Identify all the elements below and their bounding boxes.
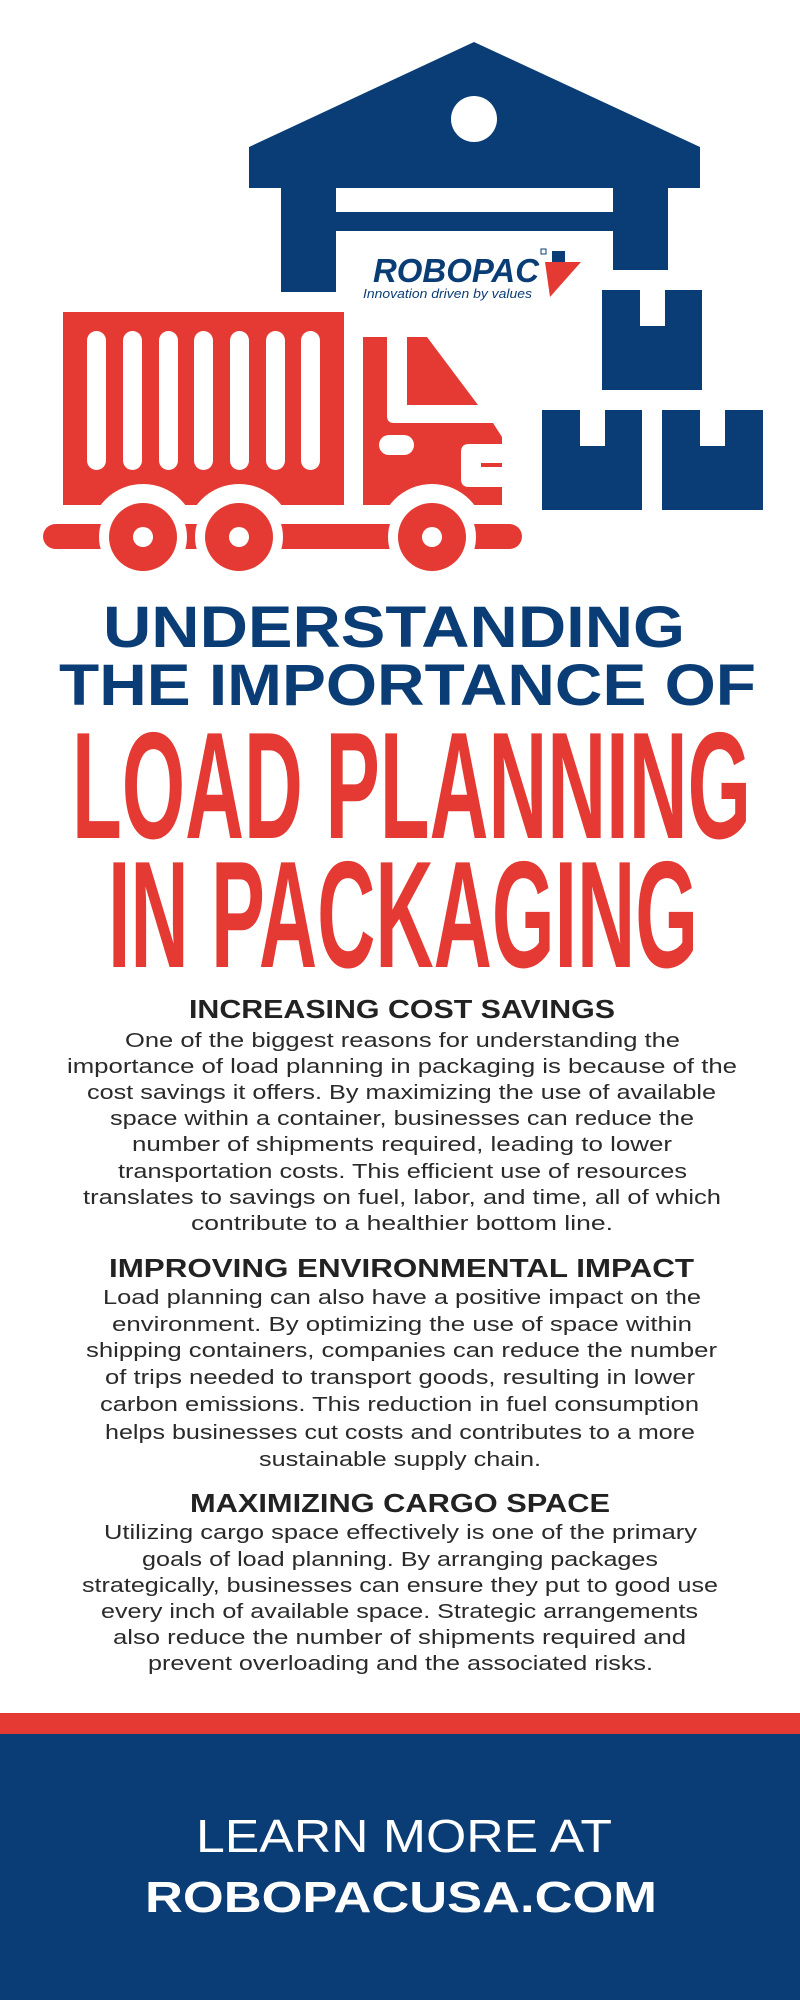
text block: cost savings body: transportation costs. This efficient use of resources (118, 1161, 687, 1183)
text block: cargo body (82, 1522, 718, 1675)
text block: cost savings body: One of the biggest reasons for understanding the (125, 1030, 680, 1052)
text block: cost savings body: contribute to a healthier bottom line. (191, 1213, 613, 1235)
logo: robopac (363, 249, 581, 301)
text block: environmental body: environment. By optimizing the use of space within (112, 1314, 692, 1336)
title (59, 595, 756, 1000)
footer text: learn more: LEARN MORE AT (196, 1810, 612, 1862)
text block: cost savings body (67, 1030, 737, 1235)
text block: environmental body: Load planning can also have a positive impact on the (103, 1287, 701, 1309)
heading: increasing cost savings: INCREASING COST SAVINGS (189, 994, 615, 1024)
text block: cargo body: prevent overloading and the associated risks. (148, 1653, 653, 1675)
text block: environmental body: sustainable supply chain. (259, 1449, 541, 1471)
text block: cost savings body: cost savings it offers. By maximizing the use of available (87, 1082, 716, 1104)
text block: environmental body: carbon emissions. This reduction in fuel consumption (100, 1394, 699, 1416)
section: improving environmental impact (86, 1253, 717, 1471)
section: increasing cost savings (67, 994, 737, 1235)
text block: cost savings body: number of shipments required, leading to lower (132, 1134, 672, 1156)
footer band (0, 1713, 800, 2000)
logo: robopac: ROBOPAC (373, 252, 540, 289)
text block: cost savings body: importance of load planning in packaging is because of the (67, 1056, 737, 1078)
text block: cargo body: also reduce the number of shipments required and (113, 1627, 686, 1649)
text block: environmental body (86, 1287, 717, 1471)
text block: cargo body: goals of load planning. By arranging packages (142, 1549, 658, 1571)
text block: cost savings body: space within a container, businesses can reduce the (110, 1108, 694, 1130)
section: maximizing cargo space (82, 1488, 718, 1675)
text block: cargo body: strategically, businesses can ensure they put to good use (82, 1575, 718, 1597)
text block: environmental body: of trips needed to transport goods, resulting in lower (105, 1367, 695, 1389)
text block: environmental body: shipping containers, companies can reduce the number (86, 1340, 717, 1362)
text block: cargo body: Utilizing cargo space effectively is one of the primary (104, 1522, 697, 1544)
footer text: url: ROBOPACUSA.COM (145, 1873, 657, 1922)
text block: environmental body: helps businesses cut costs and contributes to a more (105, 1422, 695, 1444)
logo: robopac: Innovation driven by values (363, 286, 533, 301)
heading: improving environmental impact: IMPROVING ENVIRONMENTAL IMPACT (109, 1253, 694, 1283)
title: UNDERSTANDING (103, 595, 685, 660)
title: THE IMPORTANCE OF (59, 653, 756, 718)
icon: truck (43, 312, 522, 590)
text block: cost savings body: translates to savings on fuel, labor, and time, all of which (83, 1187, 721, 1209)
text block: cargo body: every inch of available space. Strategic arrangements (101, 1601, 698, 1623)
heading: maximizing cargo space: MAXIMIZING CARGO SPACE (190, 1488, 610, 1518)
icon: boxes (542, 290, 763, 510)
icon: warehouse (249, 42, 700, 292)
